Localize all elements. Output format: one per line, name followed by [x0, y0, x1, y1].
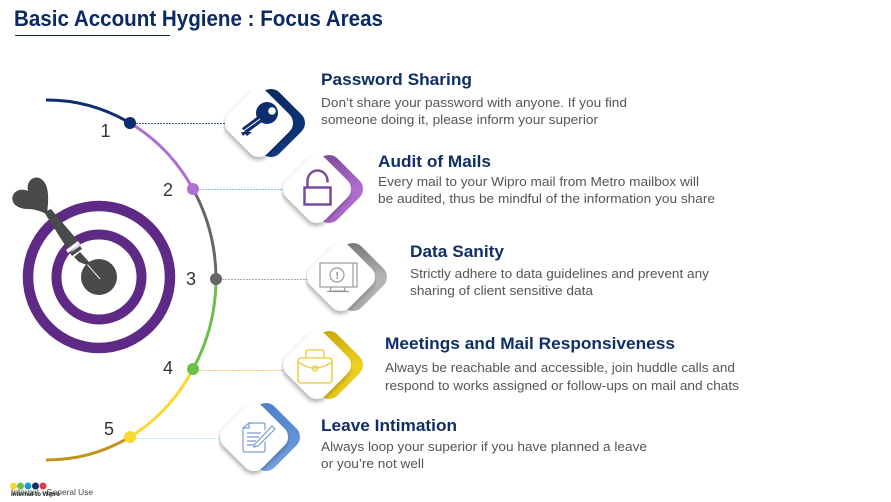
icon: briefcase — [295, 343, 351, 387]
step numbers: 2 — [163, 180, 173, 200]
heading: Password Sharing — [321, 70, 472, 89]
icon: document and pen — [232, 415, 288, 459]
panel: data sanity — [319, 242, 710, 299]
text block — [321, 439, 647, 471]
text block: someone doing it, please inform your superior — [321, 112, 599, 127]
text block — [378, 174, 715, 206]
icon: monitor alert — [319, 255, 375, 299]
text block: respond to works assigned or follow-ups on mail and chats — [385, 378, 740, 393]
icon: key — [237, 101, 293, 145]
text block: Strictly adhere to data guidelines and prevent any — [410, 266, 710, 281]
text block: be audited, thus be mindful of the information you share — [378, 191, 715, 206]
connectors — [136, 124, 308, 438]
text block: Don’t share your password with anyone. If you find — [321, 95, 627, 110]
footer logo and classification: Internal to Wipro — [11, 491, 60, 498]
heading: Leave Intimation — [321, 416, 457, 435]
heading: Meetings and Mail Responsiveness — [385, 334, 675, 353]
text block: Always loop your superior if you have planned a leave — [321, 439, 647, 454]
curved timeline arc — [46, 100, 216, 460]
text block: sharing of client sensitive data — [410, 283, 594, 298]
title: Basic Account Hygiene : Focus Areas — [14, 6, 383, 31]
text block: Always be reachable and accessible, join huddle calls and — [385, 360, 735, 375]
text block: or you’re not well — [321, 456, 424, 471]
text block — [410, 266, 710, 298]
heading: Audit of Mails — [378, 152, 491, 171]
panel: leave intimation — [232, 415, 647, 471]
panel: password sharing — [237, 70, 627, 145]
icon: padlock — [295, 167, 351, 211]
panel: audit of mails — [295, 152, 715, 211]
text block — [321, 95, 627, 127]
step numbers — [100, 121, 196, 439]
text block — [385, 360, 740, 393]
step numbers: 4 — [163, 358, 173, 378]
icon: monitor alert: ! — [336, 271, 339, 282]
footer logo and classification — [10, 482, 93, 498]
text block: Every mail to your Wipro mail from Metro mailbox will — [378, 174, 699, 189]
step numbers: 3 — [186, 269, 196, 289]
timeline nodes — [124, 117, 222, 443]
panel: meetings and mail responsiveness — [295, 334, 740, 393]
step numbers: 1 — [100, 121, 111, 141]
heading: Data Sanity — [410, 242, 505, 261]
footer logo and classification: Internal - General Use — [11, 487, 93, 497]
step numbers: 5 — [104, 419, 114, 439]
icon: target with dart — [12, 177, 170, 348]
